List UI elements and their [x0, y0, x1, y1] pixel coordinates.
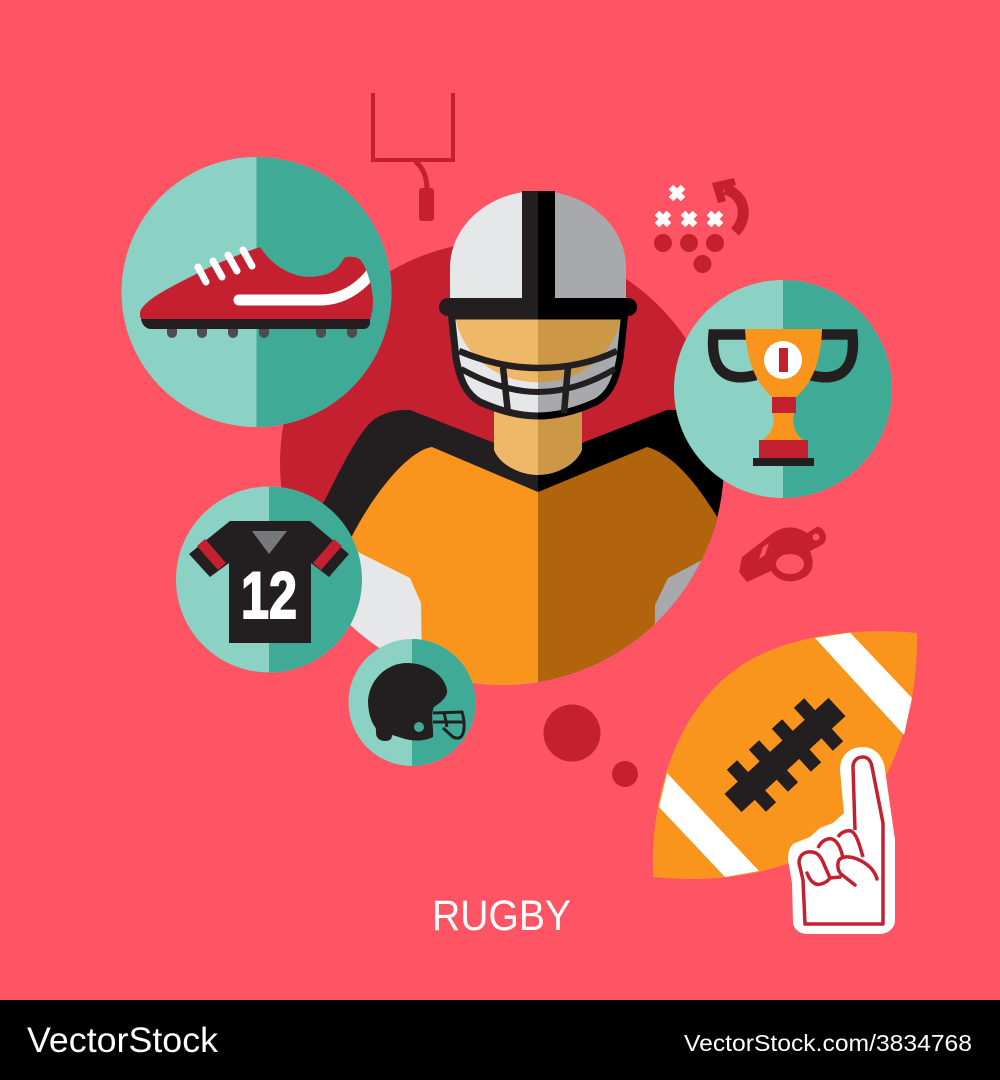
footer url: VectorStock.com/3834768	[684, 1030, 972, 1056]
icon: jersey number 12: 12	[241, 558, 297, 632]
goal post icon	[373, 93, 453, 221]
panel: jersey circle	[176, 486, 362, 672]
footer bar	[0, 1000, 1000, 1080]
icon: foam finger	[788, 747, 895, 934]
neck	[494, 405, 582, 475]
icon: rugby ball	[653, 631, 917, 879]
icon: jersey number 12	[189, 521, 349, 643]
panel: helmet circle	[348, 639, 476, 766]
large red backdrop circle	[280, 241, 724, 685]
face mask backing	[455, 320, 621, 412]
face	[455, 316, 621, 382]
footer brand: VectorStock	[27, 1021, 219, 1060]
icon: side helmet	[368, 663, 464, 741]
panel: trophy circle	[674, 280, 892, 498]
face mask cage	[452, 316, 624, 416]
title: RUGBY	[432, 892, 571, 940]
panel: cleat shoe circle	[122, 157, 392, 427]
helmet dome	[439, 191, 637, 316]
icon: cleat shoe	[140, 247, 375, 338]
icon: play diagram	[654, 178, 743, 273]
decorative dots	[544, 704, 638, 787]
icon: whistle	[739, 527, 826, 582]
player figure	[290, 191, 760, 720]
icon: trophy	[713, 329, 853, 466]
player arms	[350, 520, 716, 685]
shoulder pads	[322, 410, 724, 540]
orange jersey torso	[352, 447, 718, 685]
